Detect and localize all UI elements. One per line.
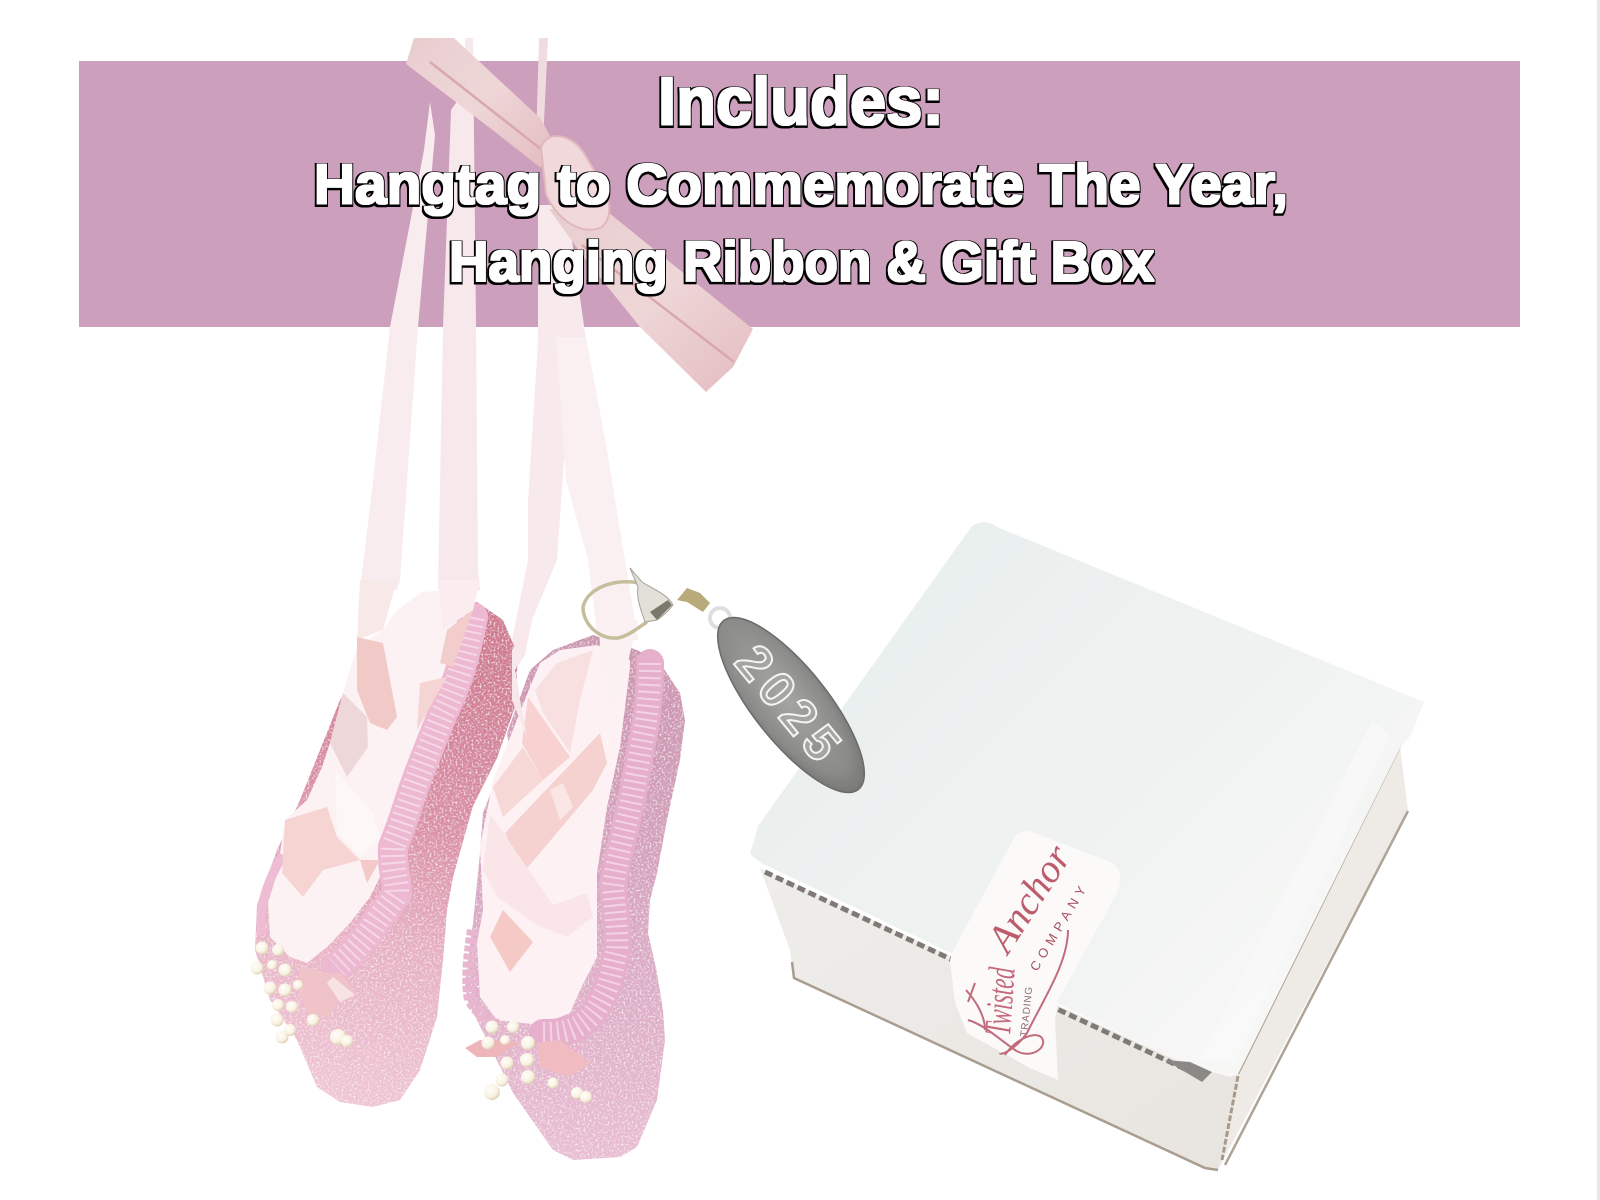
bow upper tail [406, 38, 551, 168]
left ballet shoe [250, 580, 518, 1107]
cardboard edges [1225, 746, 1408, 1165]
right ballet shoe [465, 620, 685, 1160]
pearls [250, 942, 353, 1047]
clasp body [630, 568, 673, 622]
satin lining [268, 590, 480, 963]
side trim [261, 855, 283, 935]
brand sticker [950, 831, 1120, 1080]
bow knot [541, 136, 609, 230]
tag year text: 2025 [724, 634, 856, 777]
satin lining [477, 645, 630, 1025]
page edge line [1597, 0, 1600, 1200]
toe bow [465, 1040, 590, 1077]
logo word: Twisted: Twisted [977, 965, 1024, 1037]
toe bow [297, 967, 357, 1017]
bow tail crease [430, 62, 734, 362]
corner flap [1165, 1060, 1212, 1082]
clasp ring [583, 582, 647, 638]
braided trim [543, 663, 650, 1033]
box right face [1218, 746, 1408, 1170]
ribbon: centre right [512, 205, 586, 700]
subheading line one: Hangtag to Commemorate The Year, [314, 152, 1288, 216]
box lid [750, 522, 1424, 1077]
trim loops [337, 617, 473, 967]
year hangtag [695, 598, 887, 812]
bottom edge [792, 962, 1218, 1170]
shoe body [255, 602, 518, 1107]
trim loops [543, 663, 650, 1033]
braided trim [337, 617, 473, 967]
logo word: Trading: TRADING [1019, 986, 1035, 1037]
toe bow highlight [327, 977, 355, 1002]
heading: includes: Includes: [658, 64, 944, 140]
pearls [482, 1020, 592, 1103]
shoe body [465, 635, 685, 1160]
sticker label [950, 831, 1120, 1080]
box front face [760, 868, 1238, 1170]
crossed ribbons [282, 580, 480, 897]
lower side trim [468, 930, 497, 1025]
subheading line two: Hanging Ribbon & Gift Box [449, 230, 1154, 294]
lid tab highlight [1200, 722, 1390, 1062]
logo swoosh [966, 930, 1068, 1055]
bow lower tail [549, 209, 753, 392]
ribbon: thin top strand [536, 38, 548, 143]
clasp shadow [650, 600, 672, 620]
ribbon: far left [360, 102, 435, 590]
torn corner edge [1222, 1076, 1238, 1160]
ribbon: far right [556, 337, 638, 640]
logo word: Anchor: Anchor [976, 836, 1080, 962]
banner panel [79, 61, 1520, 327]
gift box [583, 522, 1424, 1170]
hanging ribbons and bow [360, 38, 753, 700]
jump ring [710, 608, 730, 628]
ribbon: centre left [438, 38, 480, 590]
lobster clasp [583, 568, 730, 638]
crossed ribbons [483, 620, 638, 972]
chain link [677, 588, 710, 612]
corrugated edge [765, 872, 1185, 1069]
logo word: Company: COMPANY [1027, 883, 1089, 974]
